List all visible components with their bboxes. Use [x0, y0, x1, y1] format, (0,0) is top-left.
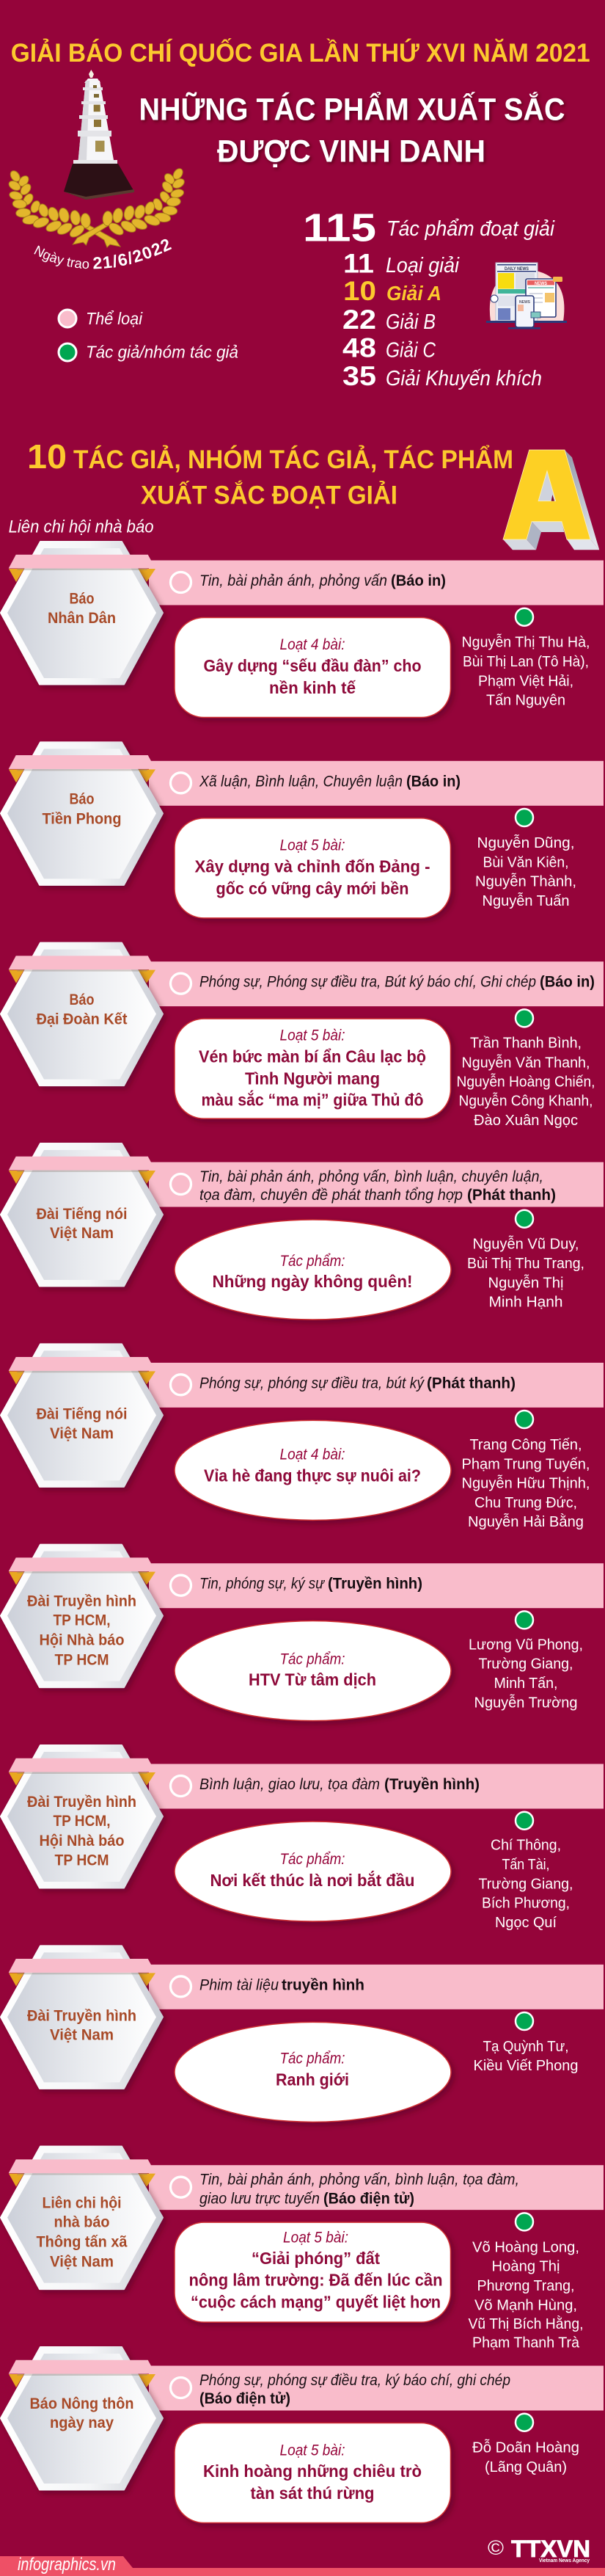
logo: TTXVN: ©: [488, 2536, 504, 2559]
unit name: Đài Tiếng nói: [37, 1405, 128, 1422]
category: Phóng sự, Phóng sự điều tra, Bút ký báo chí, Ghi chép: [199, 974, 536, 991]
stats list: Giải A: [386, 282, 441, 305]
category: (Truyền hình): [384, 1776, 480, 1793]
legend: Tác giả/nhóm tác giả: [86, 342, 238, 361]
authors: Minh Hạnh: [488, 1295, 563, 1311]
unit name: Việt Nam: [50, 1425, 114, 1442]
work title: nông lâm trường: Đã đến lúc cần: [189, 2271, 443, 2290]
authors: Ngọc Quí: [495, 1915, 557, 1931]
authors: Nguyễn Thị Thu Hà,: [462, 634, 590, 651]
authors: Nguyễn Hoàng Chiến,: [456, 1074, 595, 1091]
authors: Võ Hoàng Long,: [472, 2239, 579, 2255]
logo: TTXVN: Vietnam News Agency: [539, 2558, 590, 2564]
work title: HTV Từ tâm dịch: [249, 1670, 376, 1689]
panel: Báo Nhân Dân: [1, 542, 604, 718]
authors: Hoàng Thị: [491, 2259, 560, 2275]
category: (Báo điện tử): [199, 2390, 290, 2407]
unit name: Hội Nhà báo: [40, 1632, 125, 1649]
stats list: 11: [343, 248, 374, 278]
category: Tin, phóng sự, ký sự: [199, 1576, 325, 1593]
work title: Tác phẩm:: [280, 2050, 345, 2067]
work title: tàn sát thú rừng: [251, 2484, 374, 2503]
unit name: Đài Tiếng nói: [37, 1206, 128, 1223]
category: [199, 1576, 422, 1593]
main heading: NHỮNG TÁC PHẨM XUẤT SẮC: [139, 92, 565, 128]
authors: [468, 2239, 584, 2351]
category: Phóng sự, phóng sự điều tra, ký báo chí, ghi chép: [199, 2372, 510, 2389]
work title: Tác phẩm:: [280, 1253, 345, 1270]
work title: [189, 2230, 443, 2312]
work title: nền kinh tế: [269, 678, 356, 697]
panel: Đài Truyền hình TP HCM, HTV Từ tâm dịch: [1, 1545, 604, 1721]
unit name: ngày nay: [50, 2415, 114, 2431]
authors: Đỗ Doãn Hoàng: [472, 2439, 579, 2456]
authors: Trần Thanh Bình,: [470, 1036, 582, 1052]
icon: news devices: [486, 263, 567, 329]
work title: Loạt 5 bài:: [280, 1027, 345, 1044]
category: Tin, bài phản ánh, phỏng vấn, bình luận, tọa đàm,: [199, 2172, 519, 2188]
panel: Đài Truyền hình TP HCM, Nơi kết thúc: [1, 1745, 604, 1931]
icon: 3D letter A: [503, 450, 599, 550]
unit name: [48, 590, 116, 627]
stats list: [303, 206, 555, 391]
authors: (Lãng Quân): [485, 2459, 567, 2475]
work title: gốc có vững cây mới bền: [216, 878, 409, 898]
authors: Võ Mạnh Hùng,: [474, 2297, 577, 2313]
category: Tin, bài phản ánh, phỏng vấn, bình luận, chuyên luận,: [199, 1168, 543, 1185]
authors: Phạm Thanh Trà: [472, 2335, 580, 2351]
icon: tower monument: [64, 70, 134, 200]
work title: Gây dựng “sếu đầu đàn” cho: [204, 656, 421, 675]
unit name: TP HCM: [54, 1852, 109, 1869]
icon: news devices: NEWS: [519, 300, 530, 305]
authors: Bùi Thị Lan (Tô Hà),: [463, 654, 589, 670]
authors: Trường Giang,: [478, 1656, 573, 1673]
unit name: [37, 1206, 128, 1242]
authors: [469, 1637, 583, 1711]
panel: Đài Tiếng nói Việt Nam, Vỉa hè: [1, 1344, 604, 1530]
stats list: 115: [303, 206, 376, 250]
category: [199, 1976, 364, 1993]
unit name: Báo Nông thôn: [29, 2395, 133, 2412]
icon: news devices: NEWS: [535, 281, 548, 286]
category: (Báo điện tử): [323, 2190, 414, 2207]
category: [199, 2172, 519, 2207]
category: [199, 1776, 480, 1793]
authors: Tấn Nguyên: [486, 693, 565, 709]
panel: Đài Truyền hình Việt Nam: [1, 1946, 604, 2122]
work title: [195, 837, 430, 898]
footer bar: infographics.vn: [18, 2555, 116, 2575]
work title: màu sắc “ma mị” giữa Thủ đô: [201, 1090, 424, 1110]
unit name: Nhân Dân: [48, 610, 116, 627]
authors: Chu Trung Đức,: [474, 1495, 577, 1511]
authors: Nguyễn Công Khanh,: [459, 1093, 593, 1110]
work title: Vỉa hè đang thực sự nuôi ai?: [204, 1466, 421, 1485]
authors: Tạ Quỳnh Tư,: [483, 2039, 569, 2055]
authors: Minh Tấn,: [494, 1676, 557, 1692]
authors: Nguyễn Thành,: [475, 873, 576, 890]
authors: Nguyễn Hải Bằng: [468, 1513, 584, 1530]
work title: Tình Người mang: [245, 1069, 380, 1088]
unit name: Đài Truyền hình: [27, 1794, 136, 1811]
authors: Bích Phương,: [482, 1896, 570, 1912]
authors: [456, 1036, 595, 1129]
work title: Tác phẩm:: [280, 1851, 345, 1868]
unit name: Liên chi hội: [43, 2195, 122, 2212]
stats list: Giải Khuyến khích: [386, 367, 542, 390]
authors: Bùi Văn Kiên,: [483, 854, 569, 870]
work title: [204, 636, 421, 697]
unit name: [37, 1405, 128, 1442]
legend: [59, 309, 238, 361]
work title: [276, 2050, 349, 2089]
stats list: 10: [343, 276, 376, 306]
unit name: TP HCM,: [53, 1813, 110, 1830]
category: Tin, bài phản ánh, phỏng vấn: [199, 572, 387, 589]
work title: “cuộc cách mạng” quyết liệt hơn: [191, 2293, 441, 2312]
unit name: Đài Truyền hình: [27, 2007, 136, 2024]
authors: [462, 1437, 590, 1530]
category: giao lưu trực tuyến: [199, 2190, 320, 2207]
category: Phim tài liệu: [199, 1976, 279, 1993]
stats list: Giải C: [386, 338, 436, 362]
main heading: [139, 92, 565, 170]
icon: news devices: DAILY NEWS: [505, 266, 529, 272]
unit name: Báo: [69, 992, 94, 1008]
unit name: Việt Nam: [50, 1225, 114, 1242]
work title: Loạt 5 bài:: [283, 2230, 348, 2246]
category: (Phát thanh): [467, 1187, 556, 1204]
authors: Phạm Việt Hải,: [478, 673, 573, 689]
section heading: XUẤT SẮC ĐOẠT GIẢI: [141, 481, 397, 510]
category: [199, 1168, 556, 1204]
work title: “Giải phóng” đất: [252, 2249, 380, 2268]
authors: Đào Xuân Ngọc: [474, 1113, 578, 1129]
authors: Phương Trang,: [477, 2278, 575, 2294]
unit name: Đại Đoàn Kết: [37, 1011, 128, 1028]
authors: [474, 2039, 578, 2074]
work title: Loạt 4 bài:: [280, 1446, 345, 1463]
award date: Ngày trao 21/6/2022: [34, 239, 172, 269]
work title: Xây dựng và chỉnh đốn Đảng -: [195, 856, 430, 876]
work title: Loạt 4 bài:: [280, 636, 345, 653]
work title: [199, 1027, 426, 1110]
unit name: [27, 1794, 136, 1869]
panel: Báo Đại Đoàn Kết: [1, 943, 604, 1129]
authors: Bùi Thị Thu Trang,: [467, 1256, 584, 1272]
work title: [204, 1446, 421, 1485]
authors: Trường Giang,: [478, 1876, 573, 1892]
authors: Nguyễn Tuấn: [483, 892, 569, 909]
authors: Nguyễn Văn Thanh,: [462, 1054, 590, 1071]
work title: Ranh giới: [276, 2070, 349, 2089]
authors: Nguyễn Thị: [488, 1274, 563, 1291]
icon: golden wreath: [7, 167, 186, 247]
authors: Tấn Tài,: [502, 1857, 550, 1873]
unit name: TP HCM,: [53, 1612, 110, 1629]
stats list: 22: [342, 305, 376, 335]
category: (Báo in): [406, 773, 461, 790]
top title: GIẢI BÁO CHÍ QUỐC GIA LẦN THỨ XVI NĂM 2021: [11, 38, 590, 68]
stats list: Loại giải: [386, 254, 460, 277]
work title: [213, 1253, 412, 1291]
authors: Phạm Trung Tuyến,: [462, 1456, 590, 1472]
authors: [475, 834, 576, 909]
unit name: [27, 1593, 136, 1668]
category: (Báo in): [540, 974, 595, 991]
panel: Báo Nông thôn ngày nay: [1, 2347, 604, 2523]
panel: Báo Tiền Phong: [1, 742, 604, 918]
work title: Loạt 5 bài:: [280, 837, 345, 854]
legend: Thể loại: [86, 309, 143, 328]
authors: Nguyễn Dũng,: [477, 834, 575, 851]
section heading: 10: [27, 437, 67, 476]
stats list: Giải B: [386, 310, 436, 334]
unit name: Đài Truyền hình: [27, 1593, 136, 1610]
authors: Kiều Viết Phong: [474, 2058, 578, 2074]
authors: Nguyễn Trường: [474, 1694, 578, 1711]
authors: [478, 1838, 573, 1931]
stats list: Tác phẩm đoạt giải: [386, 217, 555, 241]
authors: [467, 1236, 584, 1311]
unit name: Báo: [69, 590, 94, 607]
footer bar: [0, 2555, 605, 2576]
authors: Nguyễn Hữu Thịnh,: [462, 1475, 590, 1492]
category: [199, 2372, 510, 2407]
authors: Lương Vũ Phong,: [469, 1637, 583, 1653]
unit name: nhà báo: [54, 2214, 110, 2231]
category: (Phát thanh): [427, 1375, 516, 1391]
unit name: TP HCM: [54, 1651, 109, 1668]
unit name: [37, 2195, 128, 2270]
unit name: Tiền Phong: [43, 810, 122, 827]
section heading: [27, 437, 513, 510]
stats list: 48: [342, 332, 376, 363]
work title: [249, 1651, 376, 1689]
authors: Chí Thông,: [491, 1838, 561, 1854]
unit name: [27, 2007, 136, 2043]
category: truyền hình: [282, 1976, 364, 1993]
unit name: Báo: [69, 791, 94, 808]
category: (Báo in): [391, 572, 446, 589]
authors: Nguyễn Vũ Duy,: [472, 1236, 579, 1253]
authors: [462, 634, 590, 709]
work title: Những ngày không quên!: [213, 1272, 412, 1291]
unit name: Việt Nam: [50, 2253, 114, 2270]
unit name: Thông tấn xã: [37, 2234, 128, 2251]
logo: TTXVN: TTXVN: [511, 2536, 590, 2562]
work title: Nơi kết thúc là nơi bắt đầu: [210, 1870, 415, 1890]
section heading: TÁC GIẢ, NHÓM TÁC GIẢ, TÁC PHẨM: [73, 445, 513, 474]
category: tọa đàm, chuyên đề phát thanh tổng hợp: [199, 1187, 463, 1204]
stats list: 35: [342, 361, 376, 391]
authors: Trang Công Tiến,: [469, 1437, 582, 1453]
authors: Vũ Thị Bích Hằng,: [468, 2315, 584, 2332]
unit name: [29, 2395, 133, 2431]
work title: [203, 2442, 422, 2503]
work title: Loạt 5 bài:: [280, 2442, 345, 2459]
category: Bình luận, giao lưu, tọa đàm: [199, 1776, 380, 1793]
panel: Liên chi hội nhà báo Thông tấn xã Việt Nam: [1, 2147, 604, 2351]
unit name: [43, 791, 122, 827]
work title: [210, 1851, 415, 1890]
category: Xã luận, Bình luận, Chuyên luận: [199, 773, 403, 790]
unit name: Hội Nhà báo: [40, 1833, 125, 1849]
authors: [472, 2439, 579, 2475]
main heading: ĐƯỢC VINH DANH: [217, 134, 485, 170]
category: (Truyền hình): [328, 1576, 422, 1593]
unit name: [37, 992, 128, 1028]
journalist association label: Liên chi hội nhà báo: [9, 517, 154, 537]
unit name: Việt Nam: [50, 2026, 114, 2043]
work title: Vén bức màn bí ẩn Câu lạc bộ: [199, 1047, 426, 1066]
work title: Kinh hoàng những chiêu trò: [203, 2462, 422, 2481]
work title: Tác phẩm:: [280, 1651, 345, 1667]
category: Phóng sự, phóng sự điều tra, bút ký: [199, 1375, 425, 1391]
panel: Đài Tiếng nói Việt Nam, Những ngày không quên: [1, 1143, 604, 1320]
